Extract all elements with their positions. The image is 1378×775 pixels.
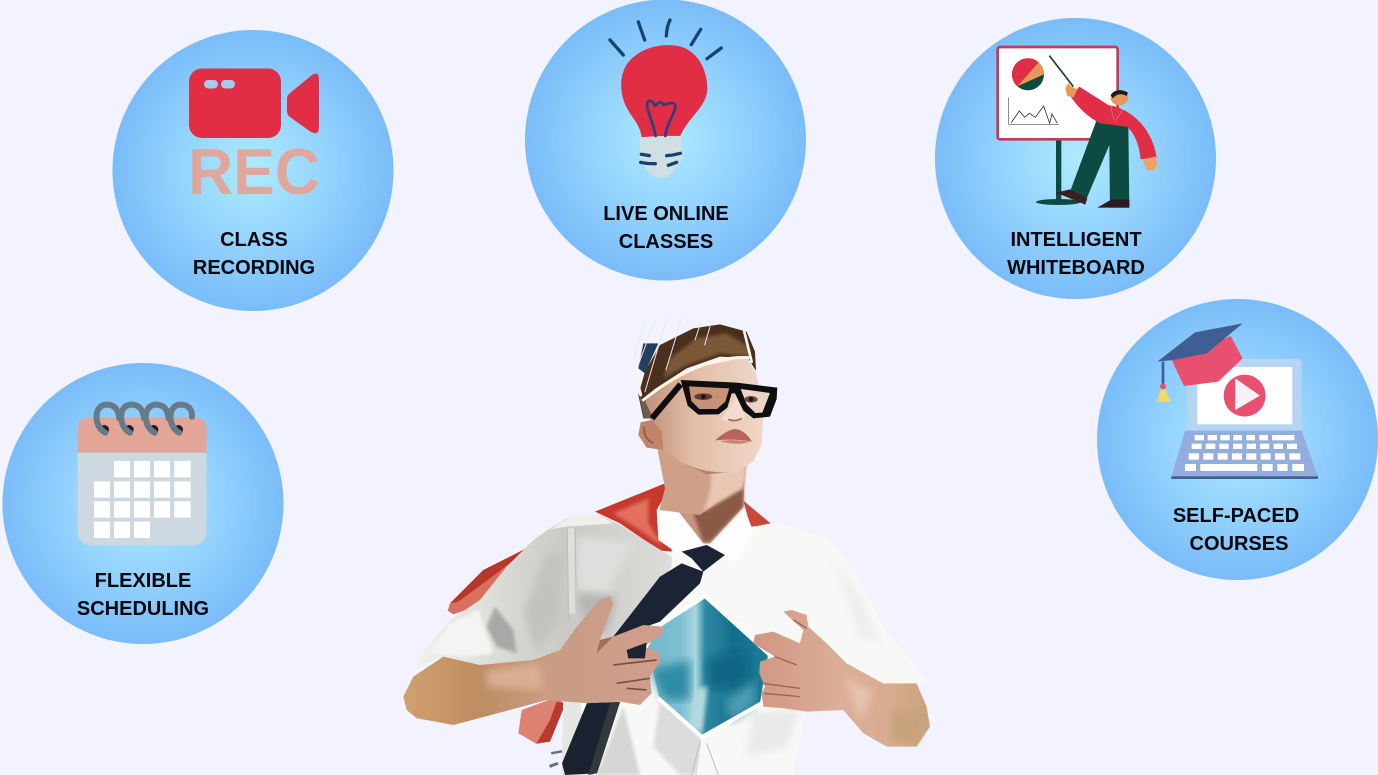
illustration: student superhero opening shirt bbox=[403, 315, 930, 775]
icon: presenter at whiteboard bbox=[998, 47, 1158, 208]
necktie bbox=[562, 563, 703, 775]
label: flexible scheduling: SCHEDULING bbox=[77, 598, 209, 620]
label: live online classes: LIVE ONLINE bbox=[603, 203, 729, 225]
label: flexible scheduling: FLEXIBLE bbox=[95, 570, 191, 592]
panel: self-paced courses bbox=[1097, 299, 1378, 580]
icon: video camera bbox=[189, 68, 319, 138]
cape right bbox=[743, 501, 771, 527]
left arm and hand bbox=[403, 596, 663, 725]
glasses bbox=[652, 380, 777, 418]
left sleeve bbox=[415, 515, 672, 668]
icon: light bulb bbox=[610, 20, 721, 178]
label: intelligent whiteboard: WHITEBOARD bbox=[1007, 257, 1145, 279]
collar and neck bbox=[657, 467, 753, 572]
head bbox=[633, 315, 763, 515]
icon text: REC: REC bbox=[188, 135, 320, 208]
panel: flexible scheduling bbox=[2, 363, 284, 644]
right arm and hand bbox=[753, 610, 930, 747]
label: class recording: RECORDING bbox=[193, 257, 315, 279]
panel: intelligent whiteboard bbox=[935, 18, 1216, 299]
label: class recording: CLASS bbox=[220, 229, 288, 251]
label: self-paced courses: SELF-PACED bbox=[1173, 505, 1299, 527]
label: self-paced courses: COURSES bbox=[1190, 533, 1288, 555]
exposed chest bbox=[648, 596, 770, 737]
icon: laptop and graduation cap bbox=[1156, 323, 1318, 479]
shirt torso bbox=[562, 523, 926, 775]
cape bbox=[448, 484, 672, 744]
panel: class recording bbox=[112, 30, 394, 311]
stray sketch marks bbox=[549, 750, 562, 768]
panel: live online classes bbox=[525, 0, 806, 280]
icon: calendar bbox=[78, 405, 207, 545]
label: live online classes: CLASSES bbox=[619, 231, 713, 253]
label: intelligent whiteboard: INTELLIGENT bbox=[1010, 229, 1142, 251]
